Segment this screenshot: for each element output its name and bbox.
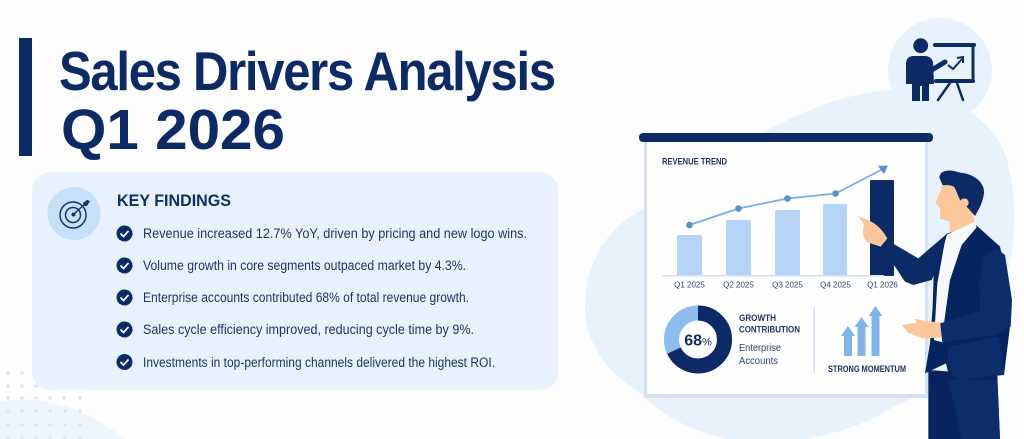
presenter figure bbox=[858, 170, 1012, 439]
axis labels: Q2 2025 bbox=[723, 280, 754, 290]
pointing arm bbox=[881, 233, 947, 285]
finding 4: Sales cycle efficiency improved, reducing cycle time by 9%. bbox=[143, 322, 474, 337]
label: strong momentum: STRONG MOMENTUM bbox=[828, 364, 906, 374]
ear bbox=[960, 198, 969, 207]
open hand bbox=[902, 319, 942, 339]
axis labels: Q1 2026 bbox=[867, 280, 898, 290]
donut chart: 68 percent: 68% bbox=[684, 332, 712, 350]
background circle bottom-left bbox=[0, 400, 125, 439]
axis labels: Q4 2025 bbox=[820, 280, 851, 290]
trouser leg highlight bbox=[948, 380, 1000, 439]
icon: presenter at board bbox=[888, 18, 992, 122]
screen top rail bbox=[639, 133, 933, 142]
title accent bar bbox=[19, 38, 32, 156]
growth contribution text: Enterprise bbox=[739, 342, 781, 354]
near sleeve bbox=[940, 247, 1012, 342]
title: Q1 2026 bbox=[61, 98, 285, 162]
growth contribution text: GROWTH bbox=[739, 313, 776, 323]
panel: key findings bbox=[32, 172, 558, 390]
icon: target bbox=[48, 187, 100, 240]
growth contribution text bbox=[739, 313, 800, 367]
finding 3: Enterprise accounts contributed 68% of total revenue growth. bbox=[143, 290, 469, 305]
heading: key findings: KEY FINDINGS bbox=[117, 192, 231, 210]
dot pattern bottom-left bbox=[6, 371, 82, 439]
finding 1: Revenue increased 12.7% YoY, driven by pricing and new logo wins. bbox=[143, 226, 527, 241]
panel: presentation screen bbox=[639, 133, 933, 398]
growth contribution text: CONTRIBUTION bbox=[739, 324, 800, 334]
axis labels bbox=[674, 280, 898, 290]
jacket hem bbox=[947, 337, 1004, 381]
finding 5: Investments in top-performing channels delivered the highest ROI. bbox=[143, 355, 495, 370]
title: Sales Drivers Analysis bbox=[59, 41, 555, 103]
jacket torso bbox=[925, 225, 1010, 380]
bar chart: revenue trend bbox=[662, 180, 894, 276]
donut chart: 68 percent bbox=[672, 313, 724, 366]
axis labels: Q1 2025 bbox=[674, 280, 705, 290]
title bbox=[59, 41, 555, 162]
background blob right bbox=[585, 90, 1014, 439]
icon: momentum arrows bbox=[841, 306, 882, 356]
pointing hand bbox=[858, 216, 887, 247]
chart heading: revenue trend: REVENUE TREND bbox=[662, 156, 727, 166]
hair bbox=[939, 170, 984, 216]
finding 2: Volume growth in core segments outpaced market by 4.3%. bbox=[143, 258, 466, 273]
trend line with arrow bbox=[686, 166, 888, 228]
axis labels: Q3 2025 bbox=[772, 280, 803, 290]
trousers bbox=[928, 370, 1000, 439]
neck and face bbox=[935, 183, 975, 234]
growth contribution text: Accounts bbox=[739, 355, 778, 367]
shirt bbox=[934, 222, 977, 342]
